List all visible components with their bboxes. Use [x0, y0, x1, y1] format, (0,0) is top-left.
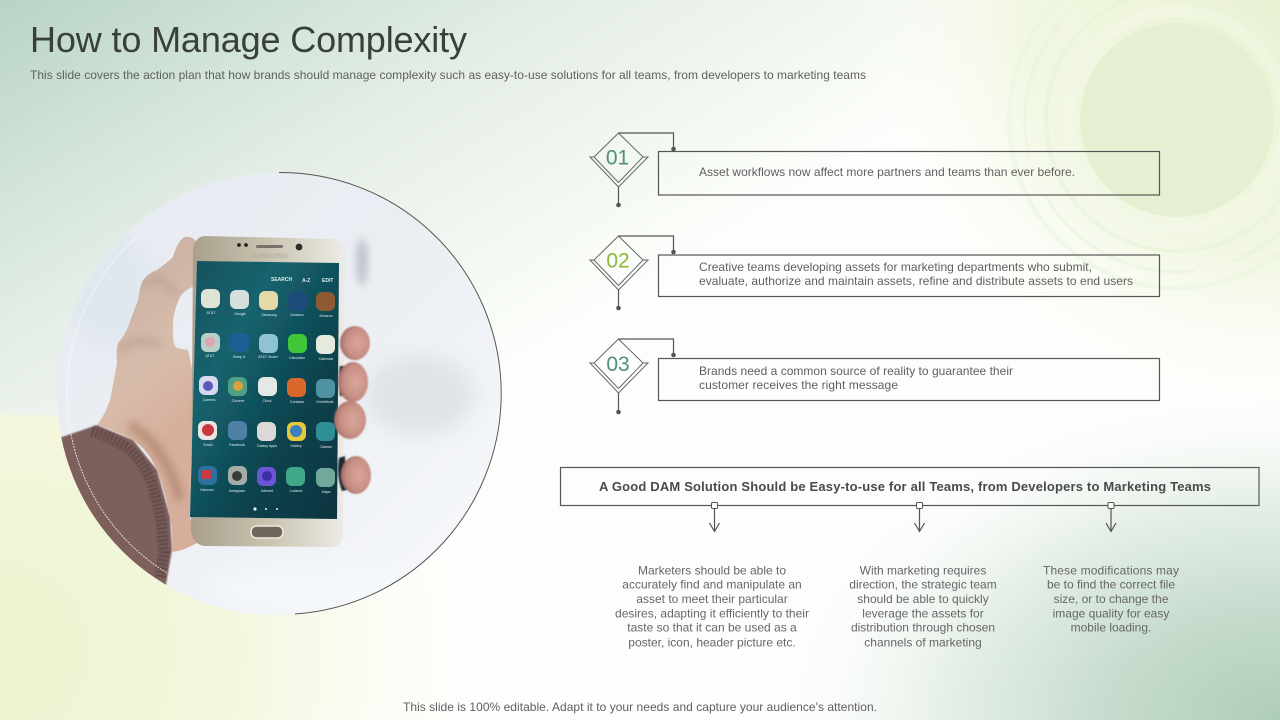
app labels: Samsung [261, 313, 277, 317]
app labels: Maps [322, 490, 331, 494]
thin arc around photo [279, 172, 501, 614]
app labels: Contacts [290, 400, 304, 404]
arrow 1 [710, 502, 720, 532]
step 01 diamond connector [590, 133, 676, 207]
subtitle: This slide covers the action plan that how brands should manage complexity such as easy-to-use solutions for all teams, from developers to marketing teams [30, 68, 866, 82]
app labels: AT&T Smart [258, 355, 278, 359]
app labels: Amazon [319, 314, 333, 318]
app labels: Google [234, 312, 246, 316]
app labels: Galaxy Apps [257, 444, 277, 448]
phone body [191, 236, 345, 547]
step number 03: 03 [606, 353, 630, 376]
footer note: This slide is 100% editable. Adapt it to your needs and capture your audience's attention. [403, 700, 877, 714]
app labels: Camera [203, 398, 215, 402]
app labels: Email [204, 443, 213, 447]
step 02 text box [658, 255, 1160, 296]
column text: strategic team: channels of marketing [864, 636, 982, 650]
column text: marketers [615, 564, 809, 650]
banner heading box [560, 468, 1259, 506]
column text: modifications: size, or to change the [1054, 592, 1169, 606]
column text: marketers: accurately find and manipulate an [622, 578, 802, 592]
app labels: AT&T [206, 354, 215, 358]
app labels: Internet [261, 489, 273, 493]
column text: marketers: poster, icon, header picture etc. [628, 636, 796, 650]
photo: hand holding smartphone in circular frame [40, 172, 500, 616]
app labels: Setup & [233, 355, 246, 359]
step 01 text box: Asset workflows now affect more partners and teams than ever before. [699, 165, 1075, 179]
phone speaker and camera: SAMSUNG [252, 253, 288, 260]
hand [97, 237, 198, 552]
screen top bar: SEARCH [271, 277, 293, 283]
column text: modifications: mobile loading. [1071, 620, 1151, 634]
step 03 text box [658, 358, 1160, 400]
step number 02: 02 [606, 250, 630, 272]
step 03 text box: Brands need a common source of reality to guarantee their [699, 364, 1013, 378]
screen top bar: EDIT [322, 278, 333, 284]
screen top bar: A-Z [302, 278, 310, 284]
fingers [334, 326, 371, 494]
app labels: Calculator [289, 356, 306, 360]
app labels: Instagram [229, 489, 245, 493]
screen top bar [271, 277, 334, 282]
column text: strategic team: distribution through chosen [851, 620, 995, 634]
app labels: Games [320, 445, 332, 449]
decorative concentric circles, top right [1009, 0, 1280, 288]
column text: marketers: taste so that it can be used as a [627, 620, 797, 634]
sleeve [61, 424, 173, 585]
app labels: Calendar [319, 357, 334, 361]
column text: modifications [1043, 564, 1179, 634]
column text: strategic team [849, 564, 997, 650]
page dots [253, 507, 278, 511]
step 01 text box [658, 152, 1160, 195]
column text: marketers: desires, adapting it efficiently to their [615, 606, 809, 620]
step number 01: 01 [606, 146, 629, 170]
column text: strategic team: With marketing requires [860, 564, 986, 578]
app labels: DriveMode [316, 400, 334, 404]
arrow 2 [914, 502, 924, 532]
photo background [57, 172, 500, 616]
app labels: AT&T [207, 311, 216, 315]
home button [251, 526, 283, 538]
title: How to Manage Complexity [30, 19, 467, 60]
column text: strategic team: leverage the assets for [862, 606, 984, 620]
app labels: Gallery [290, 444, 302, 448]
step 03 diamond connector [590, 339, 676, 414]
column text: strategic team: direction, the strategic team [849, 578, 997, 592]
column text: strategic team: should be able to quickly [857, 592, 989, 606]
app icons [198, 289, 335, 487]
phone screen [190, 261, 339, 519]
arrow 3 [1106, 502, 1116, 532]
step 02 diamond connector [590, 236, 676, 310]
white dashed inner arc [67, 234, 167, 573]
column text: modifications: be to find the correct file [1047, 578, 1175, 592]
column text: modifications: These modifications may [1043, 564, 1179, 578]
app labels: Hancom [200, 488, 214, 492]
app labels: Amazon [290, 313, 304, 317]
app labels [200, 311, 334, 494]
phone speaker and camera [237, 243, 302, 258]
banner heading box: A Good DAM Solution Should be Easy-to-use for all Teams, from Developers to Marketing Teams [599, 479, 1211, 494]
app labels: Facebook [229, 443, 245, 447]
app labels: Clock [262, 399, 272, 403]
step 03 text box: customer receives the right message [699, 378, 898, 392]
column text: marketers: Marketers should be able to [638, 564, 786, 578]
sleeve ribbing [92, 431, 164, 578]
hand shading [120, 279, 180, 500]
column text: modifications: image quality for easy [1053, 606, 1169, 620]
step 02 text box: evaluate, authorize and maintain assets, refine and distribute assets to end users [699, 274, 1133, 288]
step 02 text box: Creative teams developing assets for marketing departments who submit, [699, 260, 1092, 274]
app labels: Chrome [232, 399, 244, 403]
column text: marketers: asset to meet their particular [636, 592, 788, 606]
app labels: Lookout [290, 489, 302, 493]
